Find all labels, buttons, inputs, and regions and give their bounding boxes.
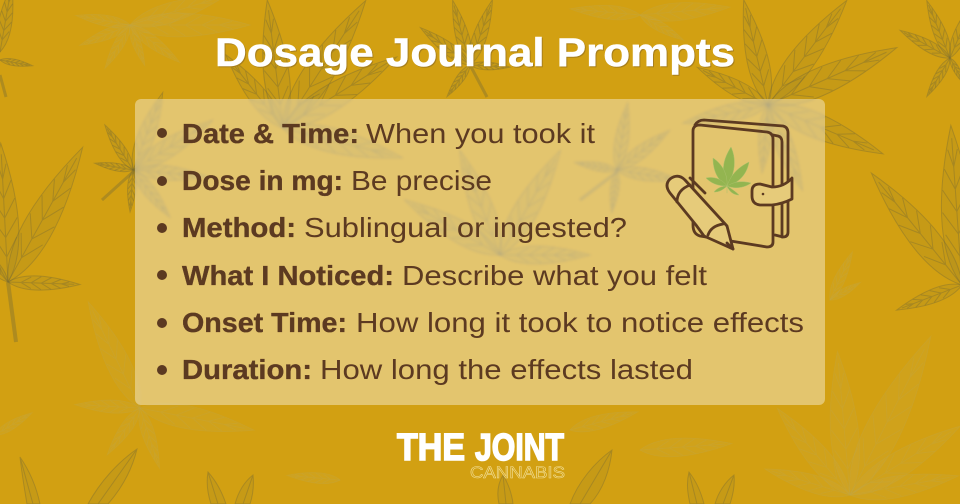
list item: what I noticed: What I Noticed: (182, 260, 394, 291)
list item: onset time: How long it took to notice effects (356, 307, 804, 338)
logo wordmark: THE (397, 427, 465, 469)
list item: date and time: Date & Time: (182, 118, 359, 149)
list item: onset time: Onset Time: (182, 307, 347, 338)
pen (667, 176, 733, 249)
list item: date and time (157, 118, 595, 149)
list item: method: Method: (182, 212, 296, 243)
strap button (762, 193, 764, 195)
list item: dose (157, 165, 492, 196)
list item: method: Sublingual or ingested? (304, 212, 627, 243)
logo wordmark: JOINT (475, 427, 564, 469)
list item: date and time: When you took it (366, 118, 595, 149)
cannabis leaf on cover (706, 147, 751, 195)
list item: what I noticed: Describe what you felt (402, 260, 707, 291)
list item: method (157, 212, 627, 243)
journal pages (773, 135, 782, 237)
title: Dosage Journal Prompts (215, 31, 735, 75)
panel: prompts card (135, 99, 825, 405)
list item: dose: Dose in mg: (182, 165, 343, 196)
pen details (677, 178, 733, 249)
list item: duration: Duration: (182, 354, 312, 385)
journal strap (752, 178, 792, 205)
prompt list (157, 118, 804, 385)
logo: The Joint Cannabis (397, 427, 565, 482)
journal back cover (695, 120, 788, 237)
list item: onset time (157, 307, 804, 338)
icon: journal with pen (667, 120, 792, 249)
list item: duration (157, 354, 693, 385)
logo subtitle: CANNABIS (470, 463, 565, 482)
list item: what I noticed (157, 260, 707, 291)
list item: dose: Be precise (351, 165, 492, 196)
list item: duration: How long the effects lasted (320, 354, 693, 385)
journal front cover (693, 125, 773, 247)
